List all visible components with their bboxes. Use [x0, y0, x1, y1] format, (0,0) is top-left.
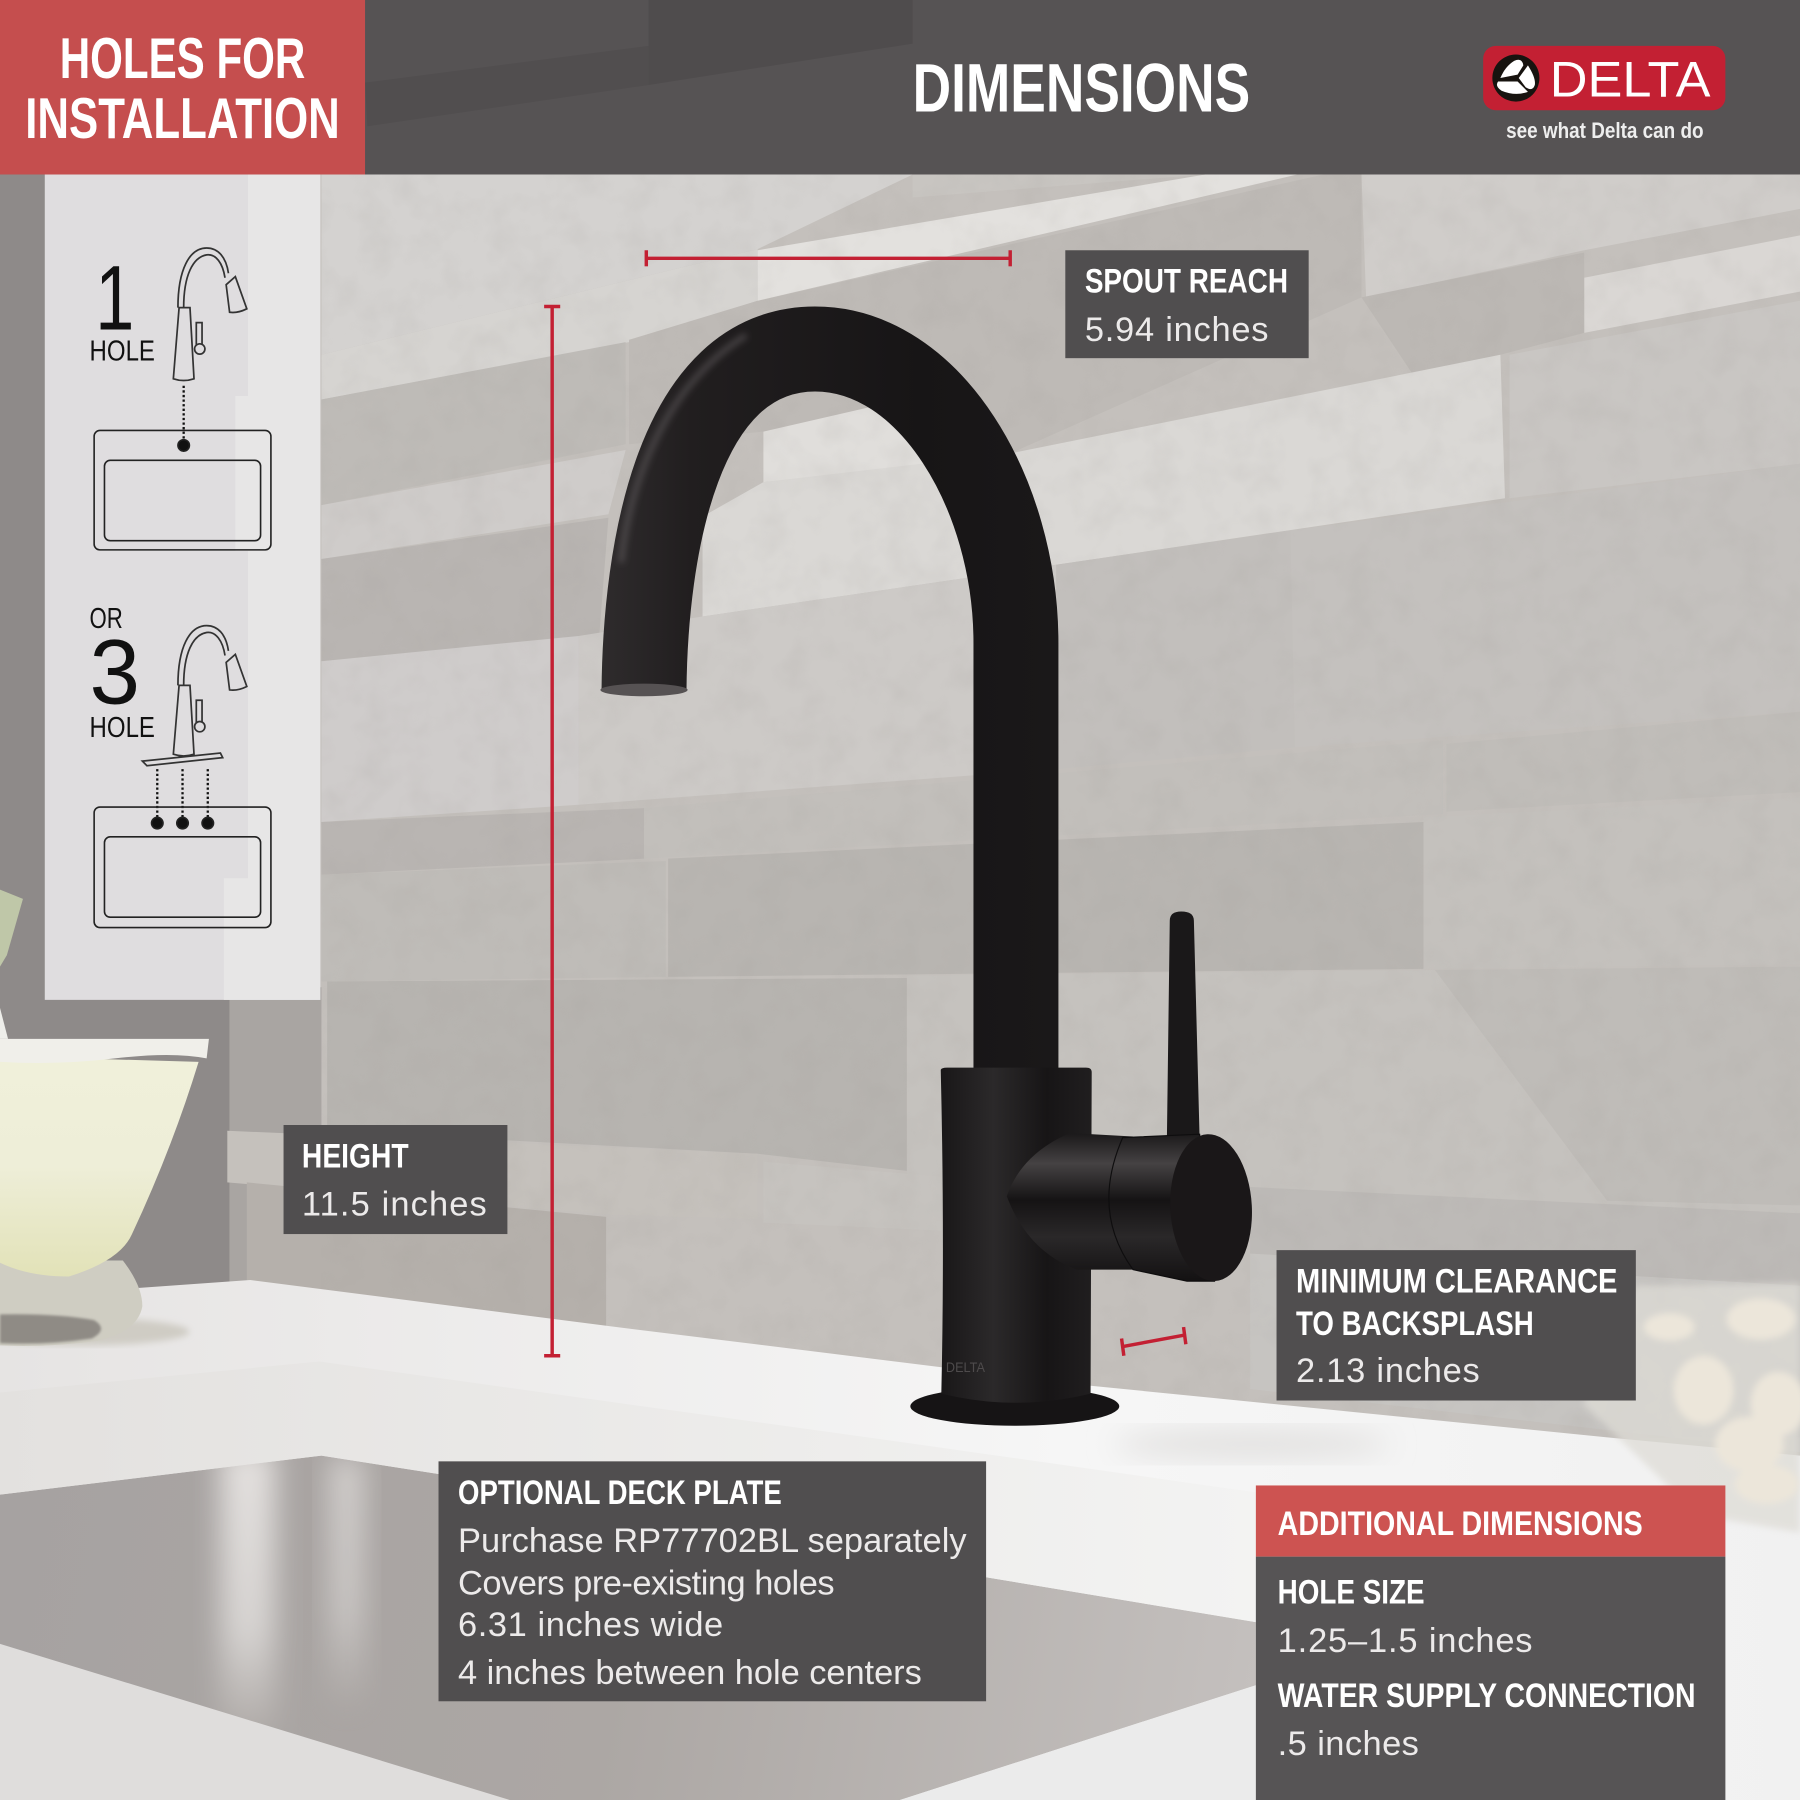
- panel: additional dimensions: 1.25–1.5 inches: [1278, 1622, 1533, 1660]
- callout: optional deck plate: [439, 1461, 986, 1701]
- icon: sink with three holes: [94, 807, 271, 928]
- spout highlight: [621, 335, 746, 562]
- panel: additional dimensions: ADDITIONAL DIMENSIONS: [1278, 1505, 1643, 1543]
- icon: faucet outline: [173, 248, 247, 381]
- faucet base plate: [910, 1387, 1119, 1426]
- callout: minimum clearance: TO BACKSPLASH: [1296, 1305, 1534, 1343]
- dotted connector: [183, 386, 185, 441]
- panel: holes for installation heading: [0, 0, 365, 174]
- faucet body: [941, 1068, 1092, 1403]
- callout: height: HEIGHT: [302, 1137, 409, 1175]
- faucet spout: [644, 349, 1016, 1070]
- icon: three hole installation: [90, 603, 271, 928]
- engraved brand on body: DELTA: [946, 1360, 986, 1375]
- callout: spout reach: 5.94 inches: [1085, 311, 1268, 349]
- callout: optional deck plate: Covers pre-existing holes: [458, 1565, 835, 1603]
- numeral 3: 3: [90, 622, 140, 724]
- dotted connectors: [157, 769, 208, 817]
- callout: optional deck plate: 4 inches between hole centers: [458, 1654, 922, 1692]
- faucet handle cap: [1167, 1132, 1256, 1283]
- panel: additional dimensions: WATER SUPPLY CONNECTION: [1278, 1677, 1696, 1715]
- callout: minimum clearance: [1277, 1250, 1636, 1401]
- callout: optional deck plate: OPTIONAL DECK PLATE: [458, 1474, 782, 1512]
- background photo: blurred bowl of shells: [1583, 1283, 1800, 1533]
- faucet handle cylinder: [1109, 1134, 1215, 1281]
- panel: holes for installation heading: INSTALLATION: [25, 87, 340, 151]
- logo: Delta: [1483, 46, 1725, 143]
- arrow: backsplash clearance dimension: [1122, 1327, 1186, 1356]
- faucet: [600, 335, 1256, 1426]
- logo: Delta: see what Delta can do: [1506, 118, 1704, 143]
- callout: height: 11.5 inches: [302, 1186, 487, 1224]
- shadow of faucet on counter: [1114, 1429, 1389, 1459]
- label: hole: HOLE: [90, 712, 155, 744]
- background photo: countertop and sink: [0, 1280, 1800, 1800]
- icon: Delta emblem: [1492, 55, 1539, 102]
- callout: optional deck plate: 6.31 inches wide: [458, 1606, 723, 1644]
- icon: sink with one hole: [94, 430, 271, 550]
- panel: additional dimensions: HOLE SIZE: [1278, 1574, 1425, 1612]
- panel: holes for installation heading: HOLES FOR: [60, 27, 305, 91]
- numeral 1: 1: [95, 247, 134, 349]
- label: or: OR: [90, 603, 123, 635]
- callout: optional deck plate: Purchase RP77702BL separately: [458, 1522, 967, 1560]
- callout: minimum clearance: 2.13 inches: [1296, 1352, 1480, 1390]
- logo: Delta: DELTA: [1550, 50, 1711, 107]
- callout: spout reach: SPOUT REACH: [1085, 263, 1288, 301]
- callout: minimum clearance: MINIMUM CLEARANCE: [1296, 1263, 1617, 1301]
- icon: one hole installation: [90, 247, 271, 550]
- arrow: height dimension: [544, 305, 560, 1357]
- faucet handle neck: [1007, 1133, 1136, 1270]
- panel: additional dimensions: [1256, 1485, 1725, 1800]
- title: DIMENSIONS: [913, 49, 1250, 126]
- callout: spout reach: [1065, 250, 1309, 358]
- faucet lever: [1167, 911, 1200, 1139]
- label: hole: HOLE: [90, 335, 155, 367]
- arrow: spout reach dimension: [645, 250, 1011, 266]
- faucet nozzle aerator: [600, 684, 688, 696]
- background photo: margarita glass: [0, 890, 209, 1346]
- panel: additional dimensions: .5 inches: [1278, 1725, 1419, 1763]
- icon: faucet outline with plate: [142, 626, 247, 766]
- panel: holes for installation background: [45, 174, 320, 1000]
- callout: height: [284, 1125, 507, 1234]
- header band: [0, 0, 1800, 174]
